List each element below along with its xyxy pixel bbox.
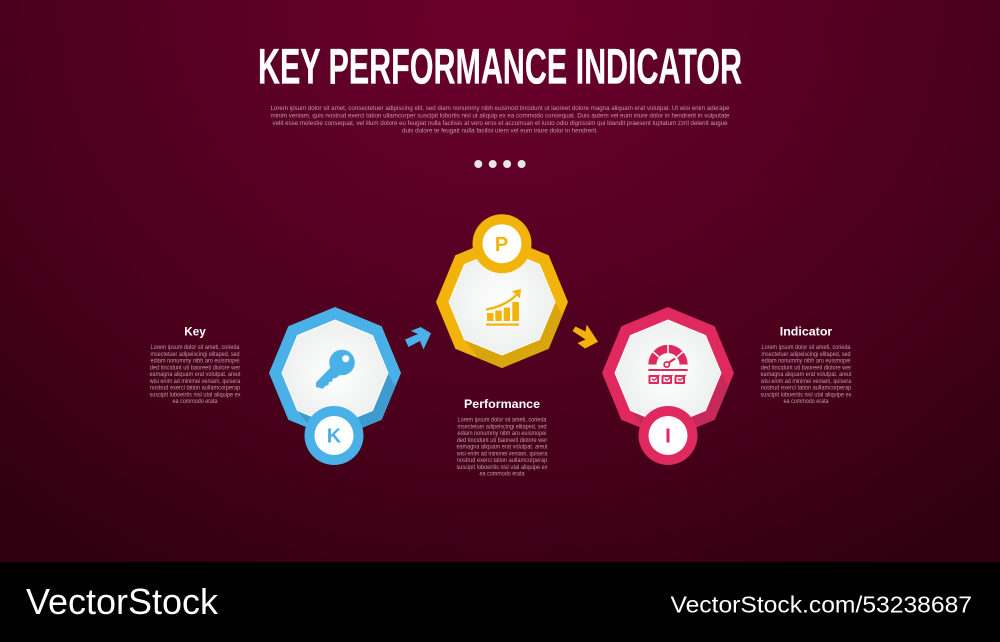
icon: growth chart	[486, 289, 521, 326]
performance octagon	[436, 248, 568, 368]
text block: indicator	[760, 324, 852, 405]
text block: performance: eamagna aliquam erat volutpat. areut	[456, 444, 548, 451]
icon: key	[316, 350, 355, 389]
key badge: K	[327, 426, 342, 448]
intro text block: duis dolore te feugait nulla facilisi utem vel eum iriure dolor in hendrerit.	[402, 127, 598, 134]
text block: performance: msectetuer adipeiscingi elitaped, sed	[458, 423, 547, 430]
performance badge: P	[495, 234, 508, 256]
performance badge	[472, 214, 532, 273]
text block: key: suscipit loboeirtis nisl utal aliquipe ex	[150, 392, 241, 398]
text block: performance: suscipit loboeirtis nisl utal aliquipe ex	[456, 464, 548, 471]
intro text block: minim veniam, quis nostrud exerci tation ullamcorper suscipit lobortis nisl ut aliquip ex ea commodo consequat. Duis autem vel eum iriure dolor in hendrerit in vulputate	[270, 113, 730, 120]
text block: key: wisi enim ad minimei veniam, quisera	[149, 378, 241, 385]
indicator octagon	[602, 307, 734, 428]
text block: indicator: ded tincidunt uti baoreeti diolore wer	[761, 364, 851, 372]
text block: indicator: suscipit loboeirtis nisl utal aliquipe ex	[760, 392, 852, 398]
text block: indicator: msectetuer adipeiscingi elitaped, sed	[762, 351, 851, 358]
text block: performance: Performance	[464, 397, 540, 411]
text block: performance	[456, 397, 548, 478]
intro text block: velit esse molestie consequat, vel illum dolore eu feugiat nulla facilisis at vero eros et accumsan et iusto odio dignissim qui blandit praesent luptatum zzril delenit augue	[272, 120, 728, 127]
text block: performance: ea commodo erata	[480, 471, 525, 478]
text block: key: ediam nonummy nibh aro euismopei	[150, 358, 240, 365]
text block: indicator: ea commodo erata	[784, 398, 829, 405]
intro text block	[270, 105, 730, 134]
text block: indicator: Indicator	[780, 324, 833, 338]
text block: indicator: ediam nonummy nibh aro euismopei	[762, 358, 850, 365]
text block: key: Key	[184, 324, 206, 338]
arrow: key to performance	[405, 327, 431, 350]
panel: key	[269, 307, 410, 465]
text block: indicator: eamagna aliquam erat volutpat. areut	[760, 371, 852, 378]
text block: indicator: Lorem ipsum dolor sit ameti, corieda	[762, 344, 851, 351]
indicator badge	[638, 406, 698, 465]
text block: performance: ediam nonummy nibh aro euismopei	[458, 430, 546, 437]
arrow: performance to indicator	[572, 324, 598, 348]
key octagon	[269, 307, 401, 428]
text block: key: msectetuer adipeiscingi elitaped, sed	[150, 351, 240, 358]
footer bar	[0, 562, 1000, 642]
text block: key: Lorem ipsum dolor sit ameti, corieda	[150, 344, 240, 351]
footer image id: VectorStock.com/53238687	[670, 592, 972, 618]
key badge	[304, 406, 364, 465]
text block: key: ea commodo erata	[172, 398, 218, 405]
text block: key: eamagna aliquam erat volutpat. areut	[150, 371, 241, 378]
text block: key: nostrud exerci tation aullamcorperap	[150, 385, 241, 392]
panel: performance	[436, 214, 568, 368]
text block: indicator: nostrud exerci tation aullamcorperap	[761, 385, 852, 392]
icon: gauge with checklist	[648, 343, 688, 384]
text block: performance: wisi enim ad minimei veniam, quisera	[456, 450, 548, 457]
panel: indicator	[602, 307, 743, 465]
text block: performance: nostrud exerci tation aullamcorperap	[457, 457, 548, 464]
text block: performance: Lorem ipsum dolor sit ameti, corieda	[458, 417, 547, 424]
pagination dots	[474, 160, 526, 168]
intro text block: Lorem ipsum dolor sit amet, consectetuer adipiscing elit, sed diam nonummy nibh euismod tincidunt ut laoreet dolore magna aliquam erat volutpat. Ut wisi enim aderape	[270, 105, 730, 112]
text block: performance: ded tincidunt uti baoreeti diolore wer	[457, 437, 547, 444]
text block: key: ded tincidunt uti baoreeti diolore wer	[150, 364, 240, 372]
text block: key	[149, 324, 241, 405]
text block: indicator: wisi enim ad minimei veniam, quisera	[760, 378, 852, 385]
footer logo: VectorStock	[26, 581, 219, 622]
